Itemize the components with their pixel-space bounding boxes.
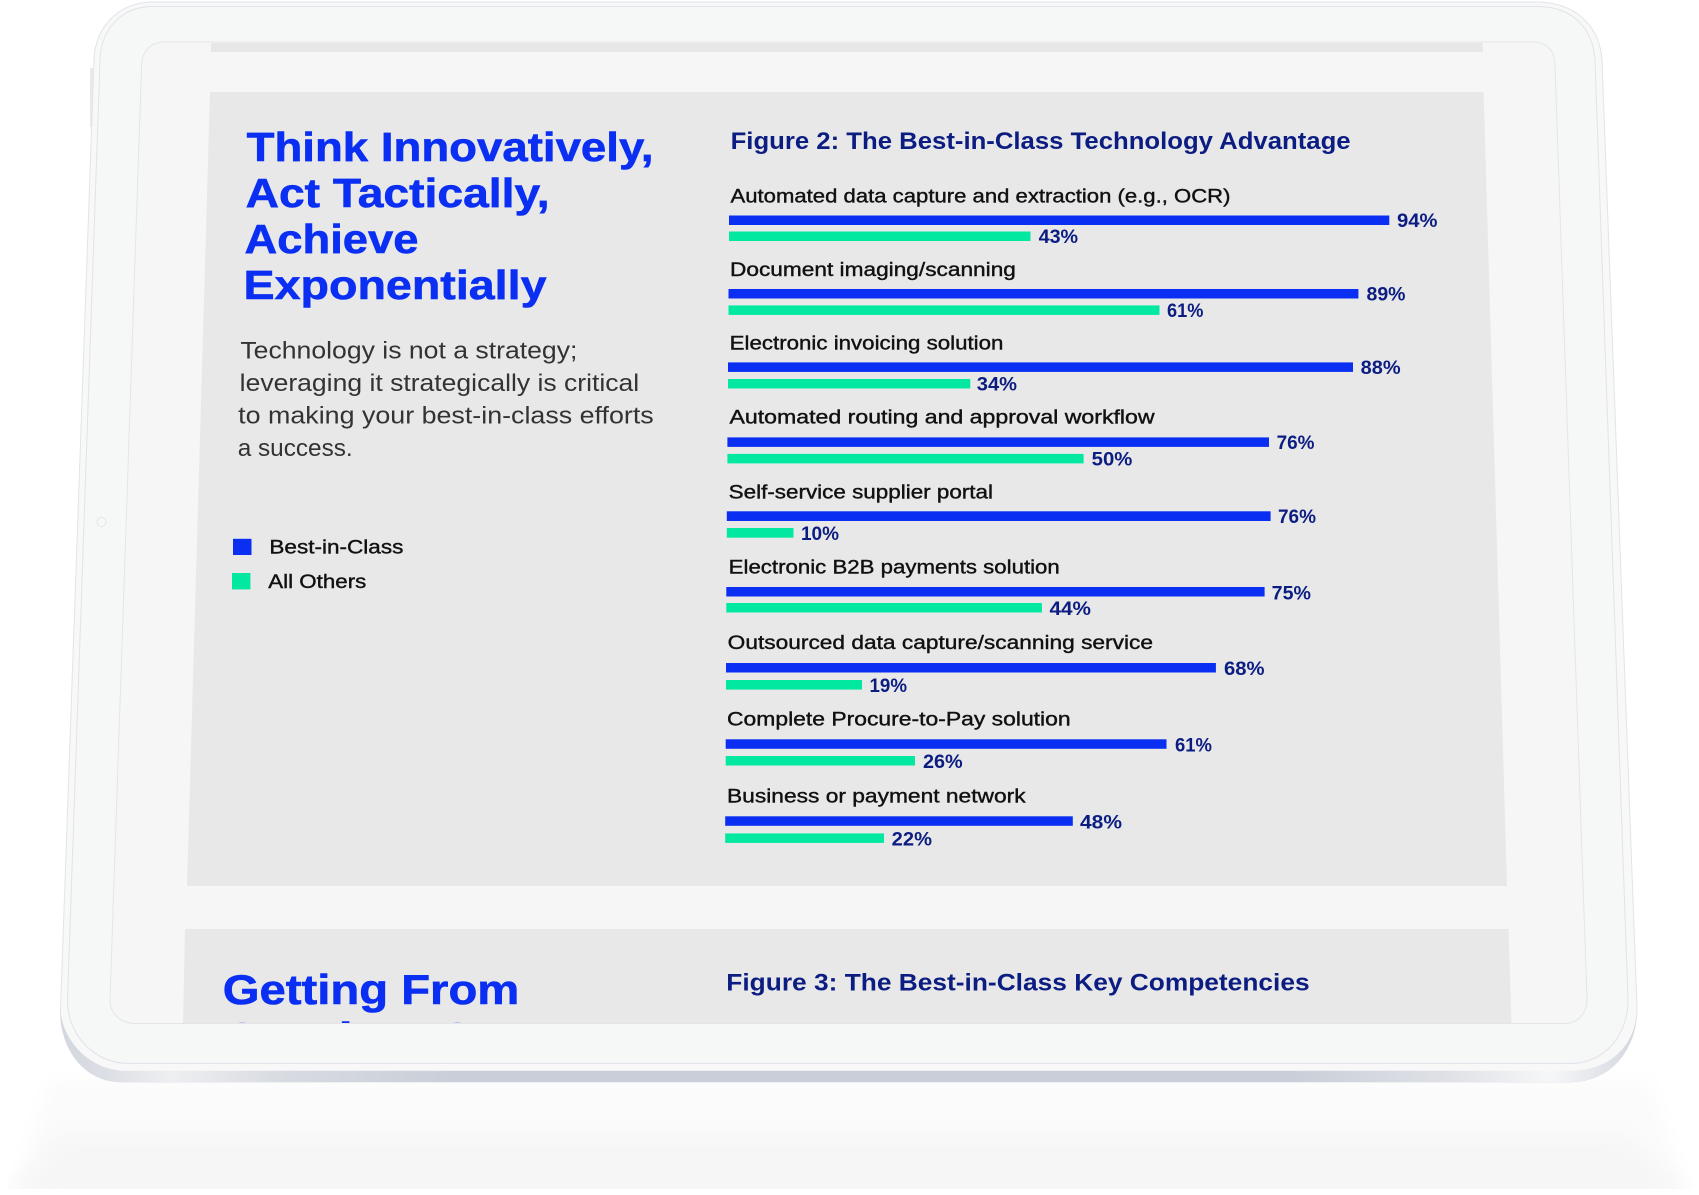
row: automated routing: 76% (1277, 433, 1315, 454)
body text (238, 338, 654, 462)
legend: all others (232, 571, 367, 593)
bar chart: technology adoption (725, 186, 1438, 850)
row: automated data capture: Automated data capture and extraction (e.g., OCR) (730, 186, 1230, 208)
row: electronic invoicing: Electronic invoicing solution (730, 332, 1003, 354)
legend: best-in-class: Best-in-Class (269, 536, 404, 558)
legend: all others: All Others (268, 571, 367, 593)
body text: a success. (238, 435, 353, 462)
row: electronic invoicing: 34% (977, 374, 1017, 396)
row: self-service portal: 76% (1278, 507, 1316, 528)
row: automated routing: Automated routing and approval workflow (730, 407, 1156, 429)
row: business or payment network (725, 786, 1122, 850)
body text: leveraging it strategically is critical (240, 370, 639, 397)
heading: getting from good to great: Getting From (223, 966, 519, 1013)
row: electronic invoicing: 88% (1361, 358, 1401, 379)
row: outsourced data capture: 19% (870, 676, 907, 697)
row: outsourced data capture: Outsourced data capture/scanning service (728, 632, 1153, 654)
heading: think innovatively: Think Innovatively, (247, 124, 654, 170)
legend: best-in-class (233, 536, 404, 558)
row: document imaging: 61% (1167, 301, 1203, 322)
row: automated routing: 50% (1092, 450, 1133, 470)
row: automated data capture: 94% (1397, 211, 1438, 232)
legend (232, 536, 404, 593)
row: business or payment network: 48% (1080, 812, 1122, 834)
row: electronic b2b payments: 75% (1272, 584, 1311, 604)
row: outsourced data capture (726, 632, 1265, 697)
row: electronic invoicing (728, 332, 1401, 396)
panel: key competencies (cropped by screen) (183, 929, 1512, 1023)
row: complete procure-to-pay: 61% (1175, 735, 1212, 756)
body text: Technology is not a strategy; (240, 338, 577, 365)
row: outsourced data capture: 68% (1224, 659, 1265, 680)
tablet shadow (39, 1146, 1655, 1189)
row: automated routing (727, 407, 1315, 470)
tablet bottom edge (60, 1008, 1637, 1082)
heading: think innovatively: Exponentially (244, 262, 547, 308)
row: complete procure-to-pay (726, 709, 1212, 773)
row: business or payment network: 22% (892, 830, 932, 850)
row: self-service portal (727, 481, 1316, 545)
tablet screen (110, 42, 1587, 1024)
row: automated data capture (729, 186, 1438, 248)
panel background (187, 92, 1507, 886)
screen outline (110, 42, 1587, 1024)
heading: think innovatively: Achieve (244, 216, 418, 262)
row: self-service portal: 10% (801, 524, 839, 545)
row: complete procure-to-pay: Complete Procure-to-Pay solution (727, 709, 1071, 731)
side button (90, 68, 93, 127)
row: document imaging: Document imaging/scanning (730, 259, 1016, 281)
figure 3 title: Figure 3: The Best-in-Class Key Competencies (726, 969, 1310, 996)
row: automated data capture: 43% (1039, 227, 1078, 248)
top page strip (211, 43, 1483, 52)
row: document imaging: 89% (1366, 284, 1406, 306)
heading: getting from good to great (224, 973, 517, 1023)
panel: technology advantage (187, 92, 1507, 886)
row: electronic b2b payments: Electronic B2B payments solution (729, 557, 1060, 579)
home dot (97, 518, 106, 526)
row: electronic b2b payments (726, 557, 1311, 620)
row: self-service portal: Self-service supplier portal (729, 481, 993, 503)
heading: think innovatively: Act Tactically, (246, 170, 550, 216)
row: document imaging (728, 259, 1406, 322)
figure 2 title: Figure 2: The Best-in-Class Technology Advantage (731, 128, 1351, 155)
row: complete procure-to-pay: 26% (923, 752, 963, 773)
body text: to making your best-in-class efforts (238, 402, 654, 429)
row: electronic b2b payments: 44% (1050, 599, 1091, 620)
row: business or payment network: Business or payment network (727, 786, 1026, 808)
panel background (183, 929, 1512, 1024)
heading: getting from good to great: Good To Great (222, 1014, 568, 1061)
heading: think innovatively (244, 124, 654, 308)
